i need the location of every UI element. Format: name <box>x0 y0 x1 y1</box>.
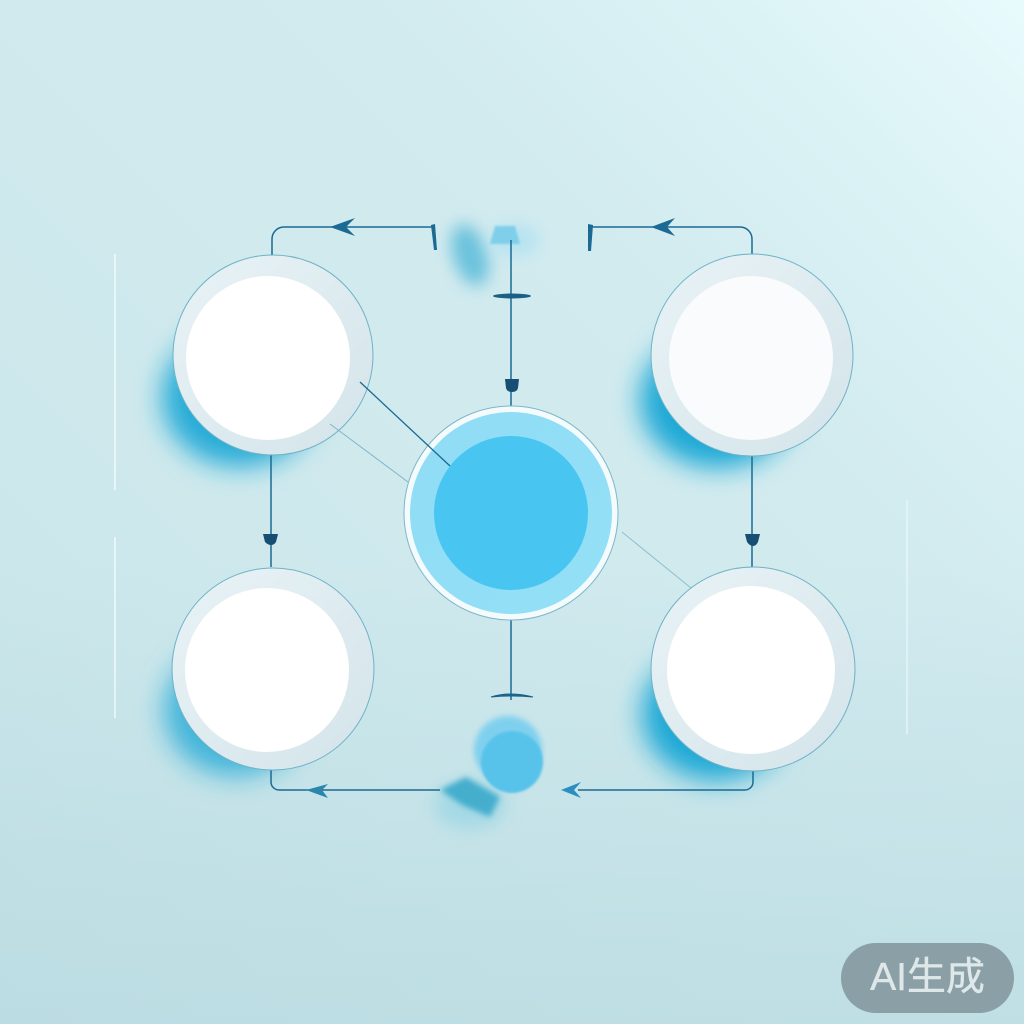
bottom connector: blurred blue marks <box>434 716 543 829</box>
node: bottom left <box>172 568 374 770</box>
central hub <box>404 406 618 620</box>
node: top right <box>651 254 853 456</box>
AI badge: AI生成 <box>870 956 985 999</box>
connector lines <box>271 227 753 790</box>
arrowheads and markers <box>263 218 760 798</box>
AI badge <box>841 943 1014 1013</box>
node: bottom right <box>651 567 855 771</box>
node shadows <box>162 327 796 780</box>
side guide lines <box>115 254 907 734</box>
node: top left <box>173 255 373 455</box>
diagonal links over nodes <box>330 382 450 482</box>
top connector: blurred blue marks <box>444 219 539 291</box>
